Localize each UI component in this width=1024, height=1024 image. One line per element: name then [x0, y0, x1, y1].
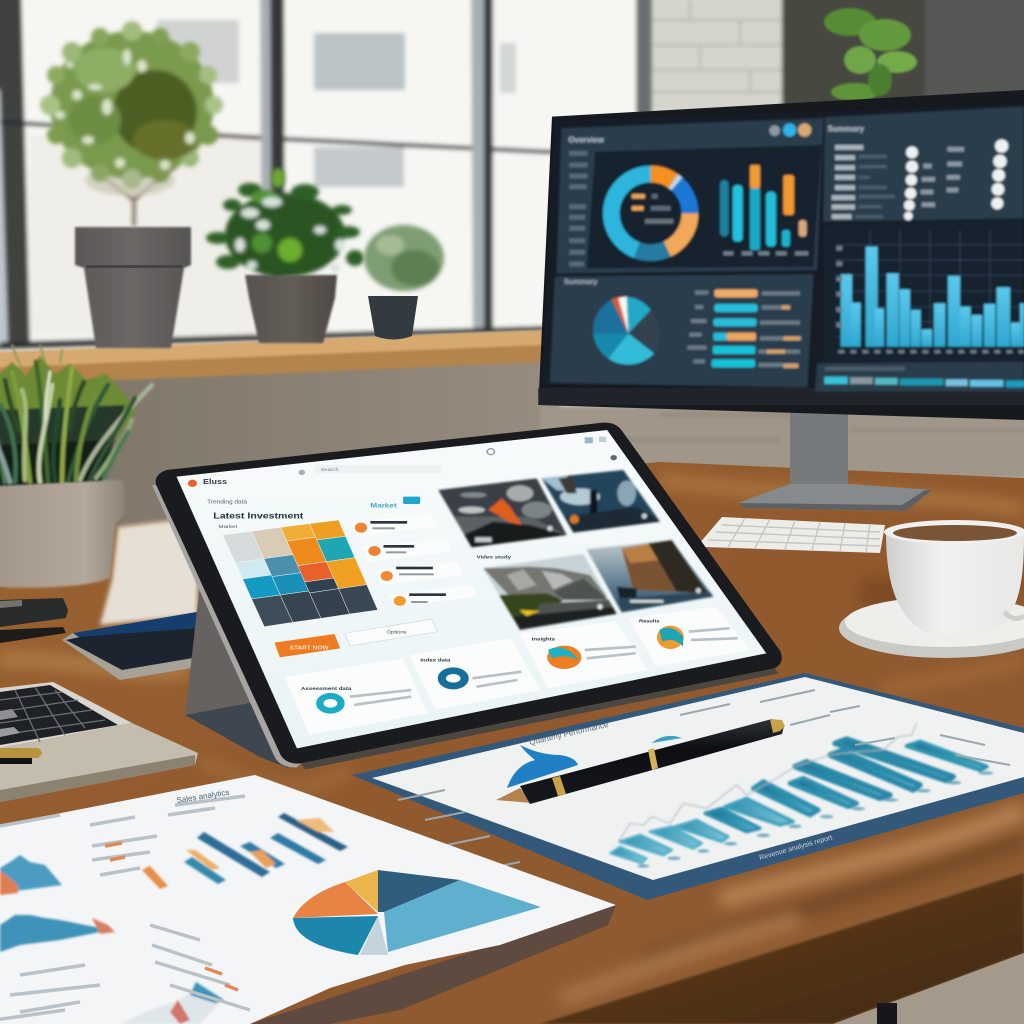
heatmap grid [223, 520, 378, 627]
photo: cliff [585, 538, 715, 613]
monitor with dark dashboard [538, 90, 1024, 420]
text: panel header: Overview [568, 136, 605, 145]
heading [207, 497, 420, 530]
pen [496, 719, 785, 804]
panel: top right list [823, 107, 1024, 222]
heading: Market [370, 501, 397, 509]
tablet stand [185, 587, 289, 768]
text: sheet heading: Quarterly Performance [528, 720, 610, 747]
phone and small devices on desk [0, 598, 197, 680]
list items [350, 513, 477, 607]
coffee cup and saucer [839, 520, 1024, 658]
donut chart [611, 174, 690, 253]
top bar [188, 437, 617, 487]
potted plant: leafy shrub [206, 168, 364, 343]
card: small pie [630, 607, 750, 667]
paper text lines [0, 796, 250, 1020]
faint buildings [157, 20, 239, 83]
sidebar list [569, 153, 587, 264]
panel: lower left pie and bars [550, 274, 813, 388]
card: orange pie: Insights [532, 637, 555, 642]
window sill [0, 330, 543, 380]
text: panel header: Summary [828, 124, 865, 133]
photo: mountains [482, 553, 618, 632]
tablet body [156, 423, 782, 764]
axis labels [838, 347, 1024, 357]
outline button: Options [387, 630, 407, 635]
desk front edge and floor [540, 873, 1024, 1024]
text: panel header: Summary [564, 277, 598, 286]
potted grass plant [0, 345, 152, 588]
orange button [274, 634, 340, 657]
card: orange pie [519, 622, 648, 688]
report sheet with bar chart, right [352, 673, 1024, 900]
tablet screen [177, 430, 766, 748]
pie chart [293, 870, 541, 955]
hanging plant behind monitor [824, 8, 917, 101]
pie chart [593, 297, 660, 365]
phone [0, 598, 68, 627]
panel: top left analytics [557, 118, 823, 273]
chart bars [841, 247, 1024, 347]
card: small pie: Results [639, 619, 660, 624]
card: teal ring [285, 658, 428, 735]
potted plant: small shrub [364, 225, 444, 340]
tablet on stand [152, 423, 782, 769]
orange button: START NOW [290, 646, 329, 651]
horizontal bars [687, 289, 802, 367]
card: blue ring: Index data [420, 658, 451, 663]
status dots [769, 123, 811, 137]
potted plant: topiary tree [40, 21, 223, 348]
text: sheet heading: Sales analytics [176, 788, 230, 805]
vertical bars [720, 165, 808, 253]
top bar: Eluss [203, 478, 227, 486]
heading: Latest Investment [213, 512, 304, 521]
legend strip [815, 362, 1024, 392]
card: teal ring: Assessment data [301, 686, 352, 692]
slanted bars [610, 723, 993, 868]
left charts [0, 855, 224, 1024]
blue pie behind pen [507, 736, 682, 788]
monitor bezel [538, 90, 1024, 420]
donut centre labels [632, 194, 673, 224]
photo tiles [437, 468, 715, 632]
heading: Market [219, 524, 238, 530]
top bar: Search [321, 467, 339, 473]
small tablet [62, 612, 196, 680]
photo: orange tent [437, 477, 570, 550]
grouped slanted bars [142, 813, 348, 889]
laptop [0, 682, 198, 802]
paper text lines [398, 690, 1010, 895]
monitor screen [542, 104, 1024, 392]
photo: hiker [540, 468, 663, 535]
pen cap [0, 748, 42, 758]
heading: Trending data [207, 500, 248, 505]
label: Video study [477, 555, 512, 560]
card: blue ring [409, 638, 540, 710]
panel: large bar chart [823, 220, 1024, 363]
desk top [0, 462, 1024, 1024]
background: window and wall [0, 0, 1024, 530]
keyboard [698, 517, 885, 553]
report sheet with pie chart, left [0, 775, 616, 1024]
stat cards [285, 607, 750, 735]
outline button [345, 619, 438, 646]
monitor stand [738, 412, 932, 511]
text: sheet footer: Revenue analysis report [759, 834, 833, 862]
